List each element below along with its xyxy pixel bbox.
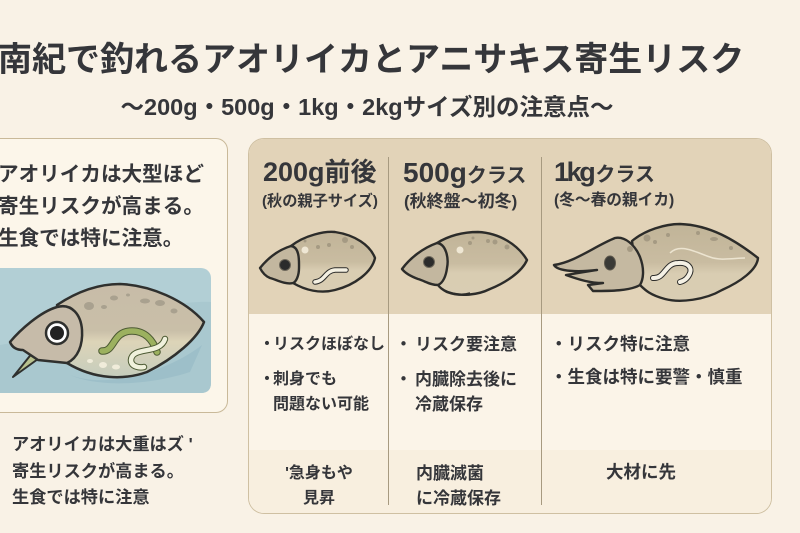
column 1 footer: 見昇 bbox=[303, 490, 335, 507]
summary text bbox=[0, 163, 204, 250]
summary text: 生食では特に注意。 bbox=[0, 227, 183, 250]
bottom-left note bbox=[12, 434, 193, 507]
column 3 heading: 1kgクラス bbox=[554, 157, 655, 187]
column 2 footer: に冷蔵保存 bbox=[416, 489, 501, 508]
bullet: raw food: ・生食は特に要警・慎重 bbox=[550, 367, 742, 387]
column divider 2 bbox=[541, 157, 542, 505]
header band bbox=[249, 139, 771, 314]
column 3 footer: 大材に先 bbox=[606, 462, 676, 482]
bottom-left note: 生食では特に注意 bbox=[12, 487, 150, 507]
bullet: viscera: 冷蔵保存 bbox=[415, 395, 483, 414]
column 2 footer: 内臓滅菌 bbox=[416, 464, 484, 483]
bullet: sashimi: 問題ない可能 bbox=[273, 396, 369, 413]
icon: 500g squid bbox=[402, 232, 527, 295]
title: 南紀で釣れるアオリイカとアニサキス寄生リスク bbox=[0, 41, 744, 79]
bullet: risk: ・リスク特に注意 bbox=[550, 334, 690, 354]
bullet: sashimi bbox=[259, 370, 369, 413]
bullet: risk: ・リスクほぼなし bbox=[259, 336, 385, 353]
column 3 bullets bbox=[550, 334, 742, 387]
bullet: viscera: ・内臓除去後に bbox=[395, 370, 517, 389]
column 3 subheading: (冬～春の親イカ) bbox=[554, 192, 674, 209]
bullet: sashimi: ・刺身でも bbox=[259, 371, 337, 388]
column 1 subheading: (秋の親子サイズ) bbox=[262, 193, 378, 210]
bottom-left note: アオリイカは大重はズ ' bbox=[12, 434, 193, 454]
column 2 heading: 500gクラス bbox=[403, 157, 526, 188]
squid illustrations bbox=[258, 222, 760, 302]
column 2 footer bbox=[416, 464, 501, 508]
icon: 1kg squid bbox=[554, 224, 758, 301]
bottom-left note: 寄生リスクが高まる。 bbox=[12, 460, 184, 480]
illustration: squid with anisakis bbox=[0, 268, 211, 393]
column 1 bullets bbox=[259, 335, 385, 413]
bullet: risk: ・リスク要注意 bbox=[395, 335, 517, 354]
panel: size comparison table bbox=[248, 138, 772, 514]
panel: summary card bbox=[0, 138, 228, 413]
summary text: 寄生リスクが高まる。 bbox=[0, 195, 204, 218]
column 2 bullets bbox=[395, 335, 517, 414]
summary text: アオリイカは大型ほど bbox=[0, 163, 204, 186]
column 2 subheading: (秋終盤～初冬) bbox=[404, 192, 517, 211]
bullet: viscera bbox=[395, 370, 517, 414]
column divider 1 bbox=[388, 157, 389, 505]
column 1 footer bbox=[285, 464, 353, 507]
column 1 heading: 200g前後 bbox=[263, 157, 377, 187]
icon: 200g squid bbox=[260, 232, 375, 292]
column 1 footer: '急身もや bbox=[285, 465, 353, 482]
subtitle: ～200g・500g・1kg・2kgサイズ別の注意点～ bbox=[121, 94, 613, 120]
footer band bbox=[249, 450, 771, 513]
